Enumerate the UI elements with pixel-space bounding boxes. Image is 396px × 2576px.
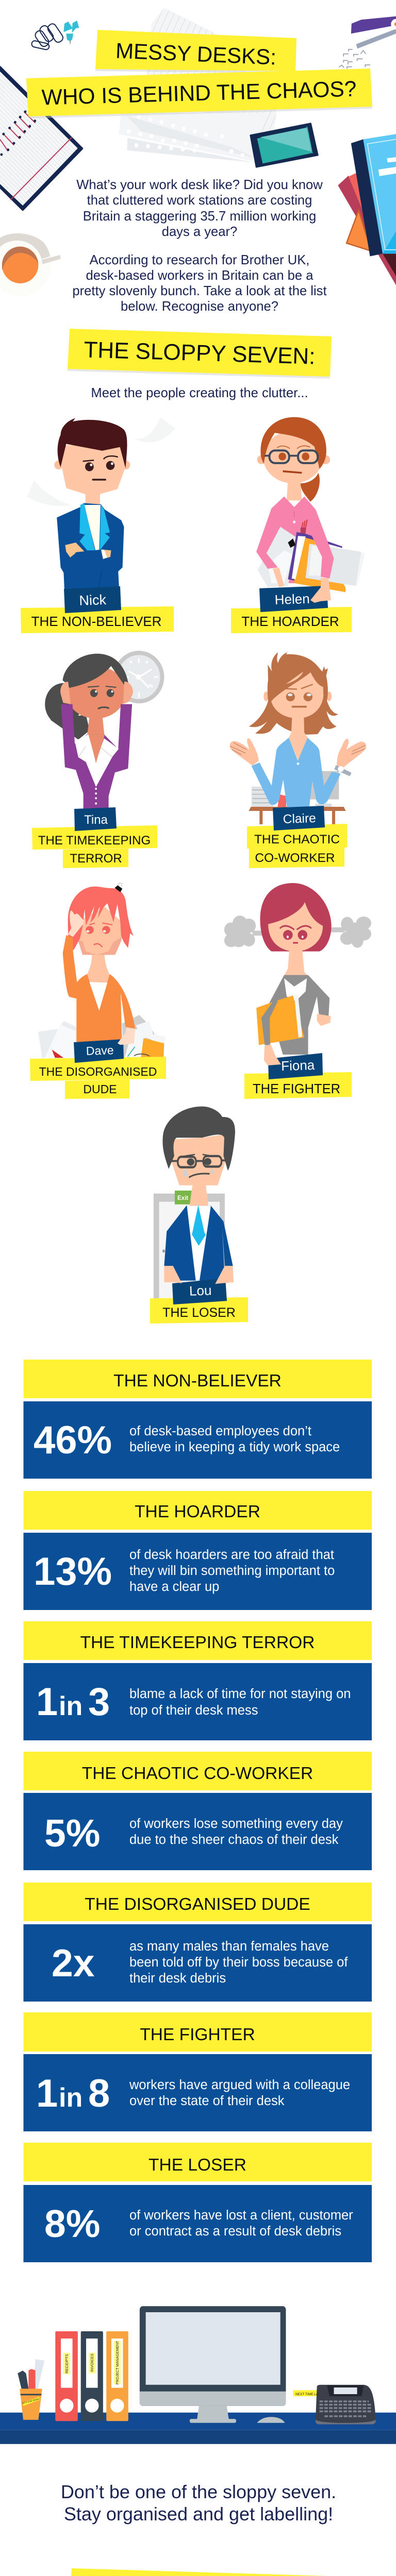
name plate: Helen: Helen (274, 591, 310, 607)
subheading: meet the people: Meet the people creating the clutter... (91, 386, 308, 400)
panel: Nick the non-believer (21, 418, 175, 633)
name plate: Nick (64, 586, 121, 613)
stat card: have a clear up (129, 1580, 219, 1594)
name plate: Lou: Lou (189, 1282, 212, 1299)
figure: Lou (154, 1107, 235, 1300)
name plate: Nick: Nick (79, 592, 107, 608)
label band: The Chaotic Co-Worker: THE CHAOTIC (254, 833, 340, 846)
stat heading: THE DISORGANISED DUDE (85, 1895, 310, 1914)
title band: Messy Desks (95, 30, 296, 73)
exit sign text: Exit (177, 1195, 188, 1201)
stat card: of desk hoarders are too afraid that (129, 1548, 334, 1562)
intro text: paragraph two: pretty slovenly bunch. Take a look at the list (72, 284, 327, 298)
stat card: over the state of their desk (129, 2094, 285, 2108)
title band: Who is behind the chaos: WHO IS BEHIND THE CHAOS? (41, 77, 357, 110)
name plate: Tina (74, 807, 117, 831)
stat card: 8% (44, 2202, 100, 2245)
intro text: paragraph one: days a year? (162, 225, 237, 239)
stat block: The Non-Believer (24, 1360, 372, 1479)
stat heading: THE TIMEKEEPING TERROR (80, 1633, 315, 1652)
stat heading (24, 1752, 372, 1790)
intro text: paragraph one (76, 178, 323, 239)
label band: The Non-Believer (21, 606, 174, 633)
stat card: blame a lack of time for not staying on (129, 1687, 351, 1701)
stat card: workers have argued with a colleague (129, 2078, 350, 2092)
hand: Fiona pointing (264, 1044, 281, 1065)
label printer (293, 2385, 376, 2425)
icon: stacked papers (119, 8, 276, 162)
stat block: The Loser (24, 2143, 372, 2262)
name plate: Dave (74, 1039, 124, 1063)
stat heading (24, 1621, 372, 1660)
panel: Claire the chaotic co-worker (230, 652, 366, 868)
stat card: 3 (88, 1680, 110, 1724)
label band: The Hoarder: THE HOARDER (241, 614, 339, 629)
stat card: 46% (34, 1418, 112, 1462)
call-to-action band: Next time label it (70, 2568, 327, 2576)
stat heading: THE FIGHTER (140, 2025, 255, 2044)
stat card: they will bin something important to (129, 1564, 335, 1578)
title band: Messy Desks: MESSY DESKS: (115, 38, 277, 70)
label band: The Disorganised Dude: THE DISORGANISED (39, 1065, 157, 1078)
stat card: 8 (88, 2072, 110, 2115)
figure: Helen (256, 417, 365, 592)
stat card: 5% (44, 1811, 100, 1855)
label band: The Timekeeping Terror (32, 825, 157, 868)
closing message: Stay organised and get labelling! (64, 2503, 333, 2524)
intro text: paragraph two: According to research for Brother UK, (90, 253, 309, 267)
stat block: The Disorganised Dude (24, 1883, 372, 2002)
icon: coffee cup (0, 232, 61, 296)
binder text: NEXT TIME LA (295, 2393, 319, 2396)
stat block: The Fighter (24, 2012, 372, 2131)
pen pot (18, 2359, 44, 2420)
closing message: Don’t be one of the sloppy seven. (61, 2481, 336, 2502)
stat card: or contract as a result of desk debris (129, 2224, 341, 2239)
label band: The Timekeeping Terror: TERROR (70, 852, 122, 866)
heading band: The Sloppy Seven: THE SLOPPY SEVEN: (84, 337, 316, 369)
heading band: The Sloppy Seven (68, 329, 332, 379)
name plate: Helen (259, 586, 328, 612)
stat card: of desk-based employees don’t (129, 1424, 311, 1438)
name plate: Claire (273, 806, 325, 831)
stat block: The Chaotic Co-Worker (24, 1752, 372, 1870)
desk surface (0, 2413, 396, 2444)
stat card: 1 (36, 2072, 58, 2115)
stat card: in (59, 2083, 82, 2113)
stat heading: THE HOARDER (135, 1502, 260, 1521)
label band: The Chaotic Co-Worker: CO-WORKER (255, 851, 335, 865)
computer monitor (140, 2306, 286, 2423)
hands: Lou holding plate (164, 1266, 234, 1284)
stat card (24, 1401, 372, 1479)
name plate: Claire: Claire (283, 811, 316, 826)
name plate: Dave: Dave (86, 1043, 114, 1058)
label band: The Timekeeping Terror: THE TIMEKEEPING (38, 834, 151, 848)
label band: The Fighter (244, 1072, 352, 1099)
label band: The Disorganised Dude (30, 1057, 166, 1099)
name plate: Lou (172, 1278, 227, 1304)
stat card: as many males than females have (129, 1939, 329, 1954)
figure: Nick (27, 418, 175, 590)
label band: The Non-Believer: THE NON-BELIEVER (31, 614, 161, 629)
binder: receipts (55, 2331, 78, 2421)
tidy desk illustration (0, 2306, 396, 2444)
stat heading (24, 2012, 372, 2052)
stat card (24, 1663, 372, 1740)
label band: The Loser: THE LOSER (162, 1306, 236, 1320)
stat card: top of their desk mess (129, 1703, 258, 1718)
icon: spiral notebook (0, 67, 82, 210)
panel: Fiona the fighter (224, 883, 371, 1099)
stat heading (24, 1360, 372, 1398)
stat card: of workers lose something every day (129, 1817, 343, 1831)
stat card (24, 1793, 372, 1870)
stat card: 13% (34, 1550, 112, 1594)
label band: The Chaotic Co-Worker (247, 824, 347, 868)
panel: Helen the hoarder (231, 417, 365, 633)
figure: Claire (230, 652, 366, 824)
intro text: paragraph two (72, 253, 327, 314)
intro text: paragraph two: desk-based workers in Britain can be a (86, 268, 314, 283)
stat block: The Timekeeping Terror (24, 1621, 372, 1740)
stat card (24, 1924, 372, 2002)
name plate: Fiona: Fiona (281, 1057, 315, 1074)
stat heading: THE NON-BELIEVER (113, 1371, 282, 1391)
stat heading (24, 1883, 372, 1921)
label band: The Fighter: THE FIGHTER (253, 1082, 340, 1096)
label band: The Loser (150, 1297, 248, 1324)
icon: paperclips (31, 22, 64, 50)
name plate: Tina: Tina (84, 813, 108, 827)
panel: Tina the timekeeping terror (32, 651, 164, 868)
stat heading (24, 2143, 372, 2181)
stat card: believe in keeping a tidy work space (129, 1440, 340, 1454)
panel: desk clutter header illustrations (0, 8, 396, 296)
stat card (24, 1533, 372, 1610)
hand: Dave on plate (118, 1028, 135, 1045)
binder text (22, 2341, 319, 2404)
label band: The Hoarder (231, 607, 352, 633)
intro text: paragraph one: Britain a staggering 35.7 million working (83, 209, 316, 224)
intro text: paragraph two: below. Recognise anyone? (121, 299, 278, 314)
figure: Fiona (224, 883, 371, 1055)
icon: stapler and staples (339, 16, 396, 69)
stat block: The Hoarder (24, 1491, 372, 1610)
panel: Lou the loser (150, 1107, 248, 1324)
figure: Tina (45, 651, 164, 810)
label band: The Disorganised Dude: DUDE (83, 1082, 117, 1096)
icon: pile of books (338, 134, 396, 285)
stat heading (24, 1491, 372, 1530)
stat card: 1 (36, 1680, 58, 1724)
title band: Who is behind the chaos (26, 69, 372, 118)
stat card: of workers have lost a client, customer (129, 2208, 353, 2223)
stat card: 2x (52, 1941, 95, 1985)
binder text: PROJECT MANAGEMENT (116, 2341, 120, 2384)
stat card (24, 2054, 372, 2131)
binder text: INVOICES (90, 2353, 94, 2372)
intro text: paragraph one: that cluttered work stations are costing (87, 193, 312, 208)
binder: invoices (81, 2331, 103, 2421)
icon: push pins (63, 21, 79, 45)
stat card (24, 2185, 372, 2262)
stat card: been told off by their boss because of (129, 1955, 348, 1970)
binder text: BITS AND BOBS (22, 2398, 40, 2404)
name plate: Fiona (268, 1053, 323, 1079)
figure: Dave (38, 883, 166, 1058)
panel: Dave the disorganised dude (30, 883, 166, 1099)
binder: project management (106, 2331, 128, 2421)
stat card: due to the sheer chaos of their desk (129, 1833, 339, 1847)
stat heading: THE LOSER (148, 2156, 246, 2175)
intro text: paragraph one: What’s your work desk like? Did you know (76, 178, 323, 192)
binder text: RECEIPTS (64, 2354, 69, 2374)
stat heading: THE CHAOTIC CO-WORKER (82, 1764, 313, 1783)
closing message (61, 2481, 336, 2524)
icon: smartphone (251, 124, 318, 167)
stat card: in (59, 1691, 82, 1721)
hand: Helen pointing (310, 578, 331, 603)
stat card: their desk debris (129, 1971, 226, 1986)
